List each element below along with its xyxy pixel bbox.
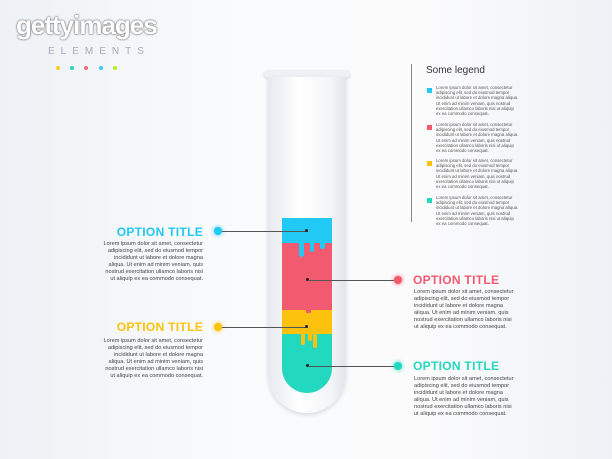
option 3: nostrud exercitation ullamco laboris nisi bbox=[105, 366, 203, 372]
connector: yellow bbox=[210, 320, 308, 334]
legend: Lorem ipsum dolor sit amet, consectetur bbox=[436, 158, 512, 163]
option 2 bbox=[413, 273, 514, 330]
legend: exercitation ullamco laboris nisi ut aliquip bbox=[436, 106, 514, 111]
option 4: incididunt ut labore et dolore magna bbox=[414, 390, 503, 396]
connector: teal bbox=[306, 358, 406, 374]
legend: ex ea commodo consequat. bbox=[436, 184, 489, 189]
legend: exercitation ullamco laboris nisi ut aliquip bbox=[436, 143, 514, 148]
connector: red bbox=[306, 273, 405, 287]
legend: incididunt ut labore et dolore magna aliqua. bbox=[436, 132, 518, 137]
option 2: Lorem ipsum dolor sit amet, consectetur bbox=[414, 289, 514, 295]
option 4 bbox=[413, 359, 514, 417]
legend: Lorem ipsum dolor sit amet, consectetur bbox=[436, 122, 512, 127]
legend: Ut enim ad minim veniam, quis nostrud bbox=[436, 211, 510, 216]
option 1: Lorem ipsum dolor sit amet, consectetur bbox=[104, 241, 203, 247]
option 3: incididunt ut labore et dolore magna bbox=[114, 352, 203, 358]
option 3: aliqua. Ut enim ad minim veniam, quis bbox=[108, 359, 203, 365]
legend: Lorem ipsum dolor sit amet, consectetur bbox=[436, 85, 512, 90]
liquid bbox=[282, 218, 332, 393]
option 4: Lorem ipsum dolor sit amet, consectetur bbox=[414, 376, 514, 382]
legend: Ut enim ad minim veniam, quis nostrud bbox=[436, 174, 510, 179]
option 1: OPTION TITLE bbox=[117, 225, 203, 239]
legend: Lorem ipsum dolor sit amet, consectetur bbox=[436, 195, 512, 200]
option 1: incididunt ut labore et dolore magna bbox=[114, 255, 203, 261]
option 2: adipiscing elit, sed do eiusmod tempor bbox=[414, 296, 509, 302]
legend: Ut enim ad minim veniam, quis nostrud bbox=[436, 101, 510, 106]
option 1: ut aliquip ex ea commodo consequat. bbox=[110, 276, 203, 282]
legend: ex ea commodo consequat. bbox=[436, 111, 489, 116]
legend: incididunt ut labore et dolore magna aliqua. bbox=[436, 205, 518, 210]
option 1: aliqua. Ut enim ad minim veniam, quis bbox=[108, 262, 203, 268]
connector: blue bbox=[210, 224, 308, 238]
legend: adipiscing elit, sed do eiusmod tempor bbox=[436, 163, 509, 168]
option 4: nostrud exercitation ullamco laboris nisi bbox=[414, 404, 512, 410]
legend bbox=[411, 64, 518, 226]
legend: exercitation ullamco laboris nisi ut aliquip bbox=[436, 179, 514, 184]
option 1: adipiscing elit, sed do eiusmod tempor bbox=[108, 248, 203, 254]
option 1 bbox=[104, 225, 203, 282]
legend: adipiscing elit, sed do eiusmod tempor bbox=[436, 90, 509, 95]
option 4: aliqua. Ut enim ad minim veniam, quis bbox=[414, 397, 509, 403]
legend: incididunt ut labore et dolore magna aliqua. bbox=[436, 168, 518, 173]
option 4: ut aliquip ex ea commodo consequat. bbox=[414, 411, 507, 417]
legend: exercitation ullamco laboris nisi ut aliquip bbox=[436, 216, 514, 221]
option 2: OPTION TITLE bbox=[413, 273, 499, 287]
option 2: incididunt ut labore et dolore magna bbox=[414, 303, 503, 309]
option 4: OPTION TITLE bbox=[413, 359, 499, 373]
logo bbox=[16, 10, 158, 70]
option 3: adipiscing elit, sed do eiusmod tempor bbox=[108, 345, 203, 351]
legend: adipiscing elit, sed do eiusmod tempor bbox=[436, 200, 509, 205]
legend: ex ea commodo consequat. bbox=[436, 221, 489, 226]
legend: ex ea commodo consequat. bbox=[436, 148, 489, 153]
logo: ELEMENTS bbox=[48, 46, 150, 57]
legend: Ut enim ad minim veniam, quis nostrud bbox=[436, 138, 510, 143]
option 4: adipiscing elit, sed do eiusmod tempor bbox=[414, 383, 509, 389]
option 2: aliqua. Ut enim ad minim veniam, quis bbox=[414, 310, 509, 316]
option 3: ut aliquip ex ea commodo consequat. bbox=[110, 373, 203, 379]
legend: Some legend bbox=[426, 65, 485, 76]
option 2: nostrud exercitation ullamco laboris nisi bbox=[414, 317, 512, 323]
option 1: nostrud exercitation ullamco laboris nisi bbox=[105, 269, 203, 275]
legend: adipiscing elit, sed do eiusmod tempor bbox=[436, 127, 509, 132]
option 3 bbox=[104, 320, 203, 379]
legend: incididunt ut labore et dolore magna aliqua. bbox=[436, 95, 518, 100]
option 2: ut aliquip ex ea commodo consequat. bbox=[414, 324, 507, 330]
option 3: OPTION TITLE bbox=[117, 320, 203, 334]
test tube bbox=[263, 70, 351, 416]
logo: gettyimages bbox=[16, 10, 157, 40]
option 3: Lorem ipsum dolor sit amet, consectetur bbox=[104, 338, 203, 344]
